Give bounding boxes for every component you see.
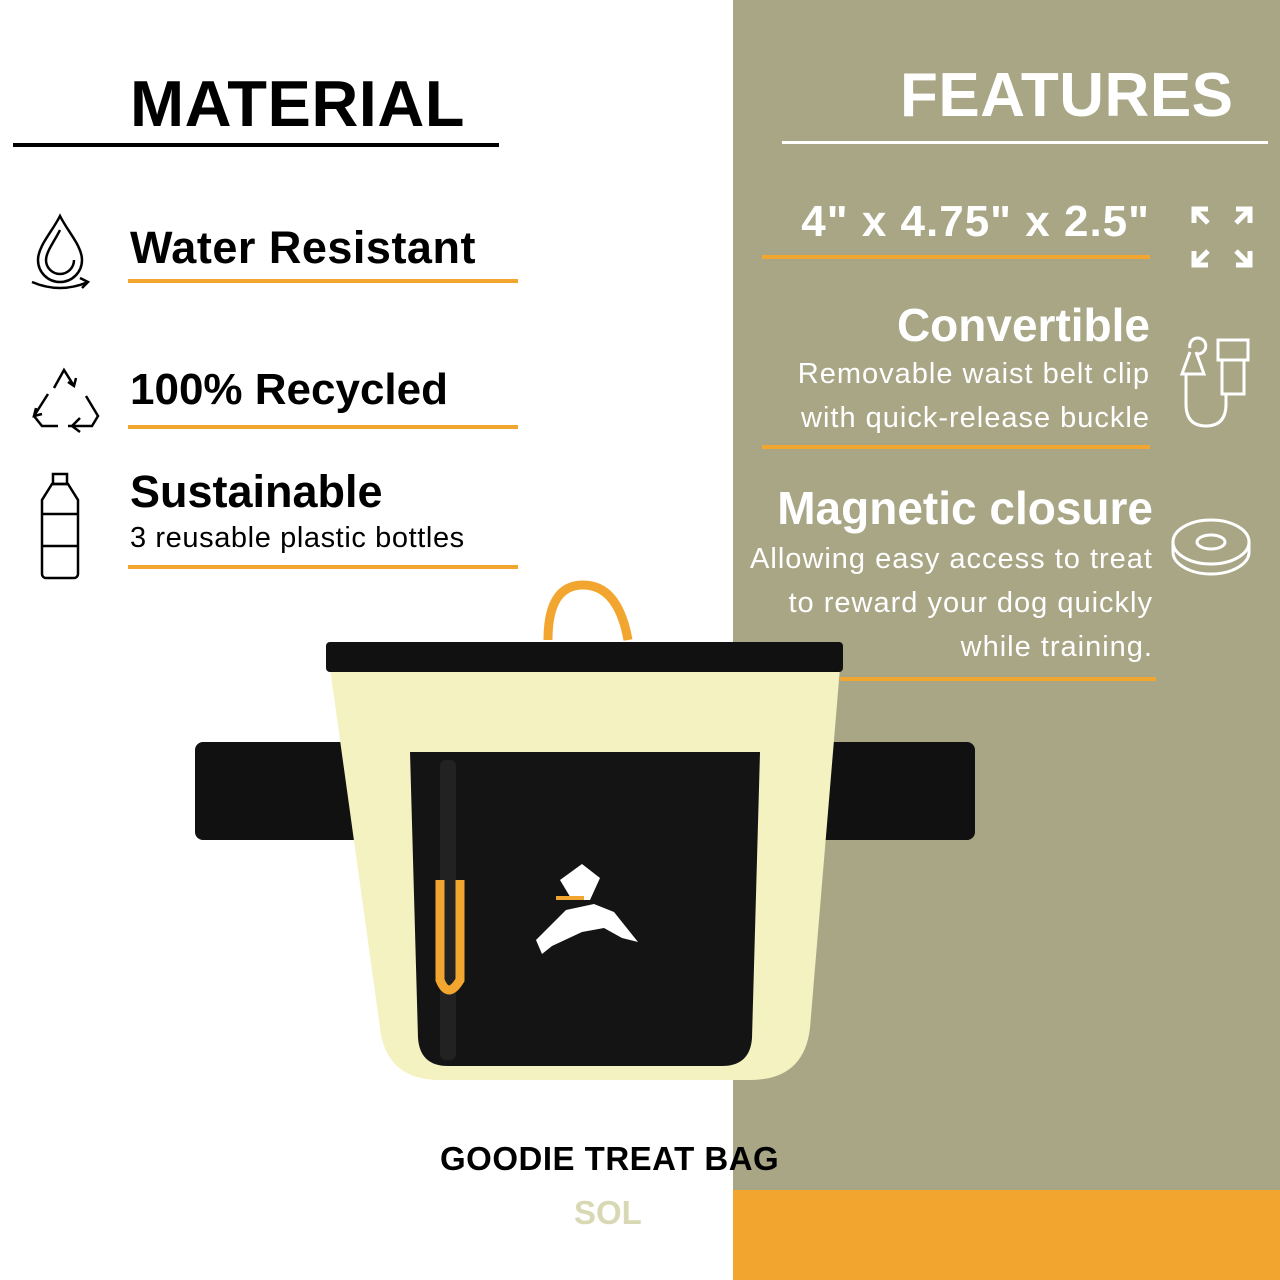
icon: magnet disc <box>1172 518 1250 576</box>
icon: bottle <box>40 472 80 580</box>
text: convertible: Convertible <box>897 299 1150 351</box>
text: convertible: Removable waist belt clip <box>798 358 1150 390</box>
icon: recycle <box>32 368 100 433</box>
product: treat bag <box>195 580 975 1080</box>
icon: water drop <box>32 213 90 290</box>
text: magnetic closure: to reward your dog quickly <box>788 587 1153 619</box>
text: magnetic closure: while training. <box>961 631 1153 663</box>
panel: features background <box>733 0 1280 1190</box>
caption: product name: GOODIE TREAT BAG <box>440 1140 779 1177</box>
icon: expand arrows <box>1192 206 1252 268</box>
text: convertible <box>798 299 1150 434</box>
text: 100% recycled: 100% Recycled <box>130 365 448 414</box>
text: convertible: with quick-release buckle <box>801 402 1150 434</box>
icon: belt clip <box>1180 336 1250 428</box>
text: sustainable <box>130 466 465 554</box>
caption: colour name: SOL <box>574 1194 642 1231</box>
text: magnetic closure: Magnetic closure <box>777 482 1153 534</box>
text: magnetic closure: Allowing easy access to treat <box>750 543 1153 575</box>
text: dimensions: 4" x 4.75" x 2.5" <box>801 197 1150 246</box>
text: sustainable: 3 reusable plastic bottles <box>130 522 465 554</box>
text: sustainable: Sustainable <box>130 466 383 517</box>
title: features: FEATURES <box>900 61 1234 130</box>
title: material: MATERIAL <box>130 67 465 140</box>
text: water resistant: Water Resistant <box>130 222 476 273</box>
text: magnetic closure <box>750 482 1153 663</box>
orange footer block <box>733 1190 1280 1280</box>
